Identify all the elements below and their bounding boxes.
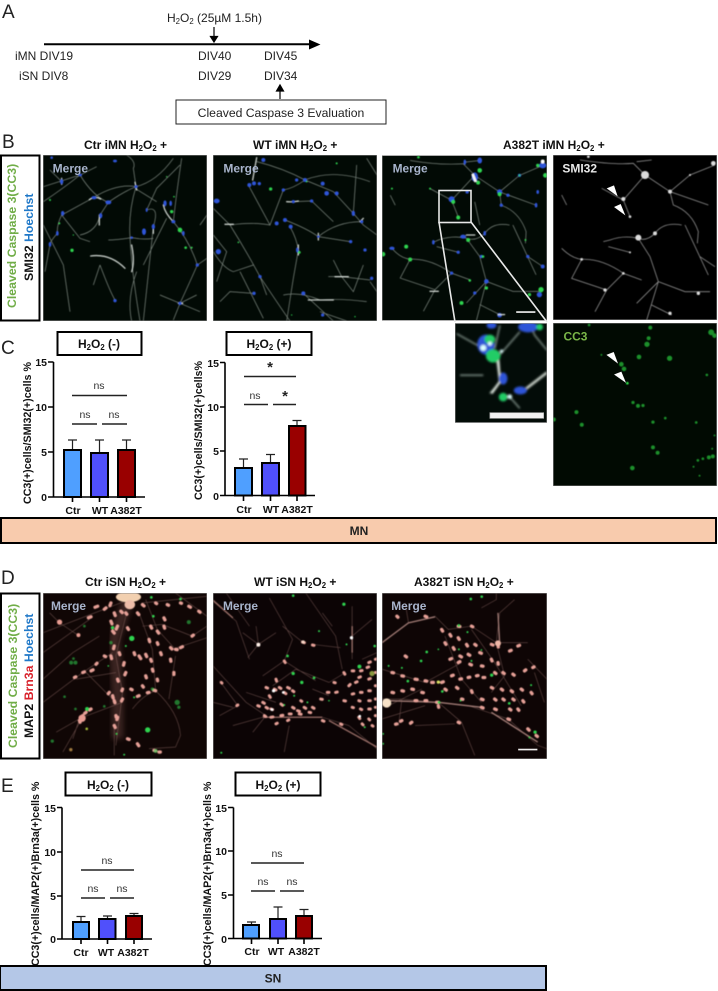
stain legend box B: SMI32 Hoechst xyxy=(22,194,36,281)
condition box: O xyxy=(259,337,269,351)
column heading: Ctr iSN: + xyxy=(156,575,166,589)
significance marks xyxy=(244,359,296,405)
panel letter A: A xyxy=(2,2,15,23)
micrograph: A382T iMN merge xyxy=(382,155,547,321)
x labels: A382T xyxy=(117,947,149,959)
timeline labels: iMN DIV19 xyxy=(15,49,73,63)
panel letter C: C xyxy=(1,338,15,359)
condition box: O xyxy=(91,337,100,351)
label: Merge: Merge xyxy=(391,599,427,613)
column heading: WT iSN: + xyxy=(326,575,336,589)
micrograph: WT iSN merge xyxy=(213,593,377,759)
axes and ticks xyxy=(35,357,145,504)
bars with error bars xyxy=(64,440,135,497)
significance marks: ns xyxy=(87,883,99,895)
label: Merge: Merge xyxy=(53,161,88,175)
axes and ticks xyxy=(215,803,322,946)
condition box: 2 xyxy=(87,343,92,352)
micrograph: A382T iSN merge xyxy=(382,593,547,759)
significance marks: ns xyxy=(79,409,91,421)
x labels xyxy=(236,504,313,516)
icon: arrowheads xyxy=(607,185,625,215)
column heading: WT iMN: 2 xyxy=(323,144,328,153)
column heading: WT iMN: + xyxy=(327,138,337,152)
scale bar xyxy=(518,749,537,750)
x labels: WT xyxy=(92,505,109,517)
condition box: 2 xyxy=(100,343,105,352)
column heading: A382T iSN: 2 xyxy=(499,581,504,590)
band: SN xyxy=(0,966,546,990)
column heading: WT iSN: 2 xyxy=(308,581,313,590)
label: Merge: Merge xyxy=(51,599,86,613)
H2O2 treatment label: (25µM 1.5h) xyxy=(194,11,262,25)
column heading: A382T iMN: 2 xyxy=(576,144,581,153)
stain legend box B: Cleaved Caspase 3(CC3) xyxy=(5,164,19,308)
condition box: O xyxy=(268,778,278,792)
column heading: Ctr iMN: 2 xyxy=(152,144,157,153)
axes and ticks xyxy=(44,803,152,946)
arrow: treatment down arrow xyxy=(210,27,218,42)
axes and ticks: 10 xyxy=(44,847,56,859)
axes and ticks: 0 xyxy=(221,934,227,946)
micrograph: Ctr iMN merge xyxy=(43,155,207,321)
condition box: (+) xyxy=(282,778,301,792)
column heading: Ctr iMN: O xyxy=(143,138,152,152)
axes and ticks: 5 xyxy=(213,446,219,458)
condition box xyxy=(66,772,152,796)
condition box: 2 xyxy=(269,343,274,352)
column heading: WT iMN: WT iMN H xyxy=(253,138,309,152)
x labels: Ctr xyxy=(65,505,81,517)
significance marks: ns xyxy=(249,390,261,402)
icon: arrowheads xyxy=(606,352,626,383)
condition box: 2 xyxy=(109,784,114,793)
significance marks: ns xyxy=(257,876,269,888)
column heading: Ctr iSN: 2 xyxy=(151,581,156,590)
stain legend box B xyxy=(1,156,40,320)
chart: MN H2O2 minus xyxy=(22,332,145,517)
x labels: Ctr xyxy=(236,504,252,516)
x labels: Ctr xyxy=(244,946,260,958)
column heading: WT iSN: O xyxy=(312,575,322,589)
chart: SN H2O2 minus xyxy=(30,772,152,966)
x labels: WT xyxy=(263,504,280,516)
axes and ticks: 5 xyxy=(50,891,56,903)
axes and ticks xyxy=(207,358,315,503)
micrograph: Ctr iSN merge xyxy=(43,593,207,759)
x labels: A382T xyxy=(281,504,313,516)
significance marks: ns xyxy=(93,380,105,392)
H2O2 treatment label: 2 xyxy=(176,17,180,26)
axes and ticks: 10 xyxy=(207,402,219,414)
label: CC3: CC3 xyxy=(563,329,588,343)
timeline labels: DIV45 xyxy=(264,49,298,63)
panel letter D: D xyxy=(1,568,15,589)
column heading: WT iSN: 2 xyxy=(322,581,327,590)
significance marks: ns xyxy=(108,409,120,421)
panel A: experimental timeline xyxy=(2,2,386,124)
condition box: H xyxy=(255,778,264,792)
condition box: H xyxy=(87,778,96,792)
condition box: H xyxy=(246,337,255,351)
evaluation box: Cleaved Caspase 3 Evaluation xyxy=(198,106,364,120)
axes and ticks: 15 xyxy=(215,803,227,815)
condition box xyxy=(58,332,142,355)
column heading: A382T iSN: + xyxy=(503,575,514,589)
condition box: 2 xyxy=(264,784,269,793)
micrograph: SMI32 channel xyxy=(553,155,717,320)
condition box: H xyxy=(78,337,87,351)
axes and ticks: 0 xyxy=(213,491,219,503)
significance marks: ns xyxy=(271,848,283,860)
significance marks xyxy=(72,380,127,424)
bars with error bars xyxy=(243,907,312,938)
axes and ticks: 15 xyxy=(35,357,47,369)
H2O2 treatment label: O xyxy=(180,11,189,25)
column heading: Ctr iMN: + xyxy=(157,138,167,152)
inset selection box and zoom lines xyxy=(439,190,547,322)
column heading: Ctr iMN: 2 xyxy=(139,144,144,153)
axes and ticks: 15 xyxy=(44,803,56,815)
column heading: Ctr iMN: Ctr iMN H xyxy=(84,138,139,152)
label: Merge: Merge xyxy=(393,162,428,176)
axes and ticks: 5 xyxy=(41,447,47,459)
condition box: 2 xyxy=(278,784,283,793)
micrograph: enlarged inset xyxy=(455,323,547,423)
x labels: A382T xyxy=(288,946,320,958)
condition box: (-) xyxy=(114,778,129,792)
column heading: Ctr iSN: Ctr iSN H xyxy=(85,575,138,589)
scale bar xyxy=(516,311,535,313)
label: Merge: Merge xyxy=(223,599,258,613)
axes and ticks: 0 xyxy=(50,934,56,946)
micrograph: CC3 channel xyxy=(553,323,717,486)
column heading: A382T iSN: O xyxy=(490,575,499,589)
significance marks: ns xyxy=(116,883,128,895)
condition box xyxy=(226,332,312,355)
significance marks: * xyxy=(267,359,273,376)
column heading: A382T iSN: A382T iSN H xyxy=(414,575,485,589)
chart: MN H2O2 plus xyxy=(193,332,315,516)
axes and ticks: 15 xyxy=(207,358,219,370)
stain legend box D: MAP2 Brn3a Hoechst xyxy=(22,614,36,738)
significance marks xyxy=(251,848,304,891)
column heading: WT iMN: O xyxy=(313,138,323,152)
stain legend box D: Cleaved Caspase 3(CC3) xyxy=(6,604,20,748)
axes and ticks: 5 xyxy=(221,890,227,902)
condition box: 2 xyxy=(96,784,101,793)
condition box: 2 xyxy=(255,343,260,352)
y axis label: CC3(+)cells/MAP2(+)Brn3a(+)cells % xyxy=(30,781,42,966)
panel letter B: B xyxy=(2,132,15,153)
column heading: WT iMN: 2 xyxy=(309,144,314,153)
band: SN: SN xyxy=(265,972,281,986)
column heading: A382T iMN: 2 xyxy=(590,144,595,153)
column heading: A382T iMN: + xyxy=(594,138,605,152)
arrow: main timeline xyxy=(44,41,318,48)
significance marks: ns xyxy=(286,876,298,888)
axes and ticks: 10 xyxy=(35,402,47,414)
y axis label: CC3(+)cells/MAP2(+)Brn3a(+)cells % xyxy=(202,781,214,966)
x labels xyxy=(73,947,149,959)
panel letter E: E xyxy=(1,776,14,797)
x labels: Ctr xyxy=(73,947,89,959)
band: MN xyxy=(1,518,716,543)
timeline labels: DIV34 xyxy=(264,69,298,83)
chart: SN H2O2 plus xyxy=(202,772,322,966)
label: Merge: Merge xyxy=(223,161,259,175)
column heading: A382T iMN: A382T iMN H xyxy=(503,138,576,152)
column heading: Ctr iSN: O xyxy=(142,575,151,589)
x labels: WT xyxy=(98,947,115,959)
condition box: (+) xyxy=(273,337,292,351)
micrograph: WT iMN merge xyxy=(213,155,377,321)
timeline labels: iSN DIV8 xyxy=(19,69,69,83)
x labels: WT xyxy=(268,946,285,958)
condition box: (-) xyxy=(105,337,120,351)
bars with error bars xyxy=(235,420,306,496)
timeline labels xyxy=(15,49,298,83)
column heading: A382T iSN: 2 xyxy=(485,581,490,590)
column heading: Ctr iSN: 2 xyxy=(138,581,143,590)
y axis label: CC3(+)cells/SMI32(+)cells% xyxy=(193,361,205,500)
label: SMI32: SMI32 xyxy=(562,161,597,175)
column heading: A382T iMN: O xyxy=(581,138,590,152)
band: MN: MN xyxy=(350,524,368,538)
x labels: A382T xyxy=(110,505,142,517)
timeline labels: DIV29 xyxy=(198,69,232,83)
scale bar xyxy=(490,413,544,418)
evaluation box xyxy=(176,100,386,124)
axes and ticks: 0 xyxy=(41,492,47,504)
significance marks: * xyxy=(282,388,288,405)
condition box xyxy=(236,772,320,796)
x labels xyxy=(244,946,320,958)
condition box: O xyxy=(100,778,109,792)
y axis label: CC3(+)cells/SMI32(+)cells % xyxy=(22,362,34,504)
H2O2 treatment label: H xyxy=(167,11,176,25)
stain legend box D xyxy=(1,594,40,758)
H2O2 treatment label: 2 xyxy=(189,17,194,26)
arrow: evaluation up arrow xyxy=(276,85,284,99)
column heading: WT iSN: WT iSN H xyxy=(254,575,308,589)
timeline labels: DIV40 xyxy=(198,49,232,63)
axes and ticks: 10 xyxy=(215,846,227,858)
significance marks xyxy=(81,855,134,898)
bars with error bars xyxy=(73,914,142,939)
x labels xyxy=(65,505,142,517)
significance marks: ns xyxy=(101,855,113,867)
